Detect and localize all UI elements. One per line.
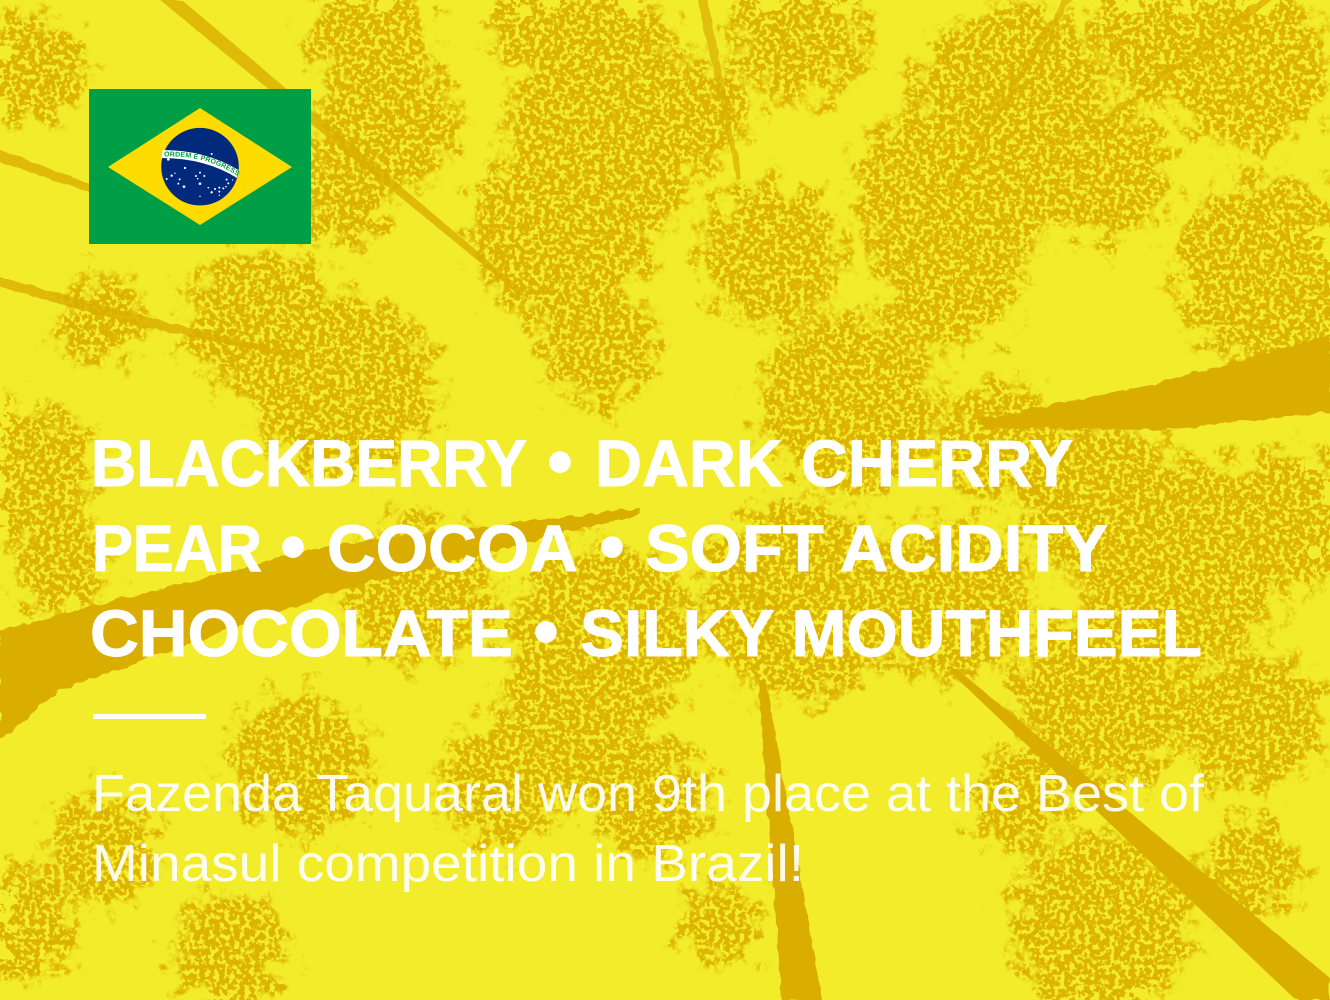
heading: flavour notes: •: [280, 507, 306, 587]
heading: flavour notes: •: [547, 422, 573, 502]
heading: flavour notes: PEAR: [92, 511, 262, 585]
heading: flavour notes: DARK CHERRY: [595, 426, 1073, 500]
heading: flavour notes: •: [533, 592, 559, 672]
heading: flavour notes: COCOA: [327, 511, 578, 585]
text block: competition note: Fazenda Taquaral won 9th place at the Best of: [92, 765, 1205, 823]
heading: flavour notes: [90, 422, 1202, 672]
heading: flavour notes: •: [599, 507, 625, 587]
text block: competition note: Minasul competition in Brazil!: [92, 835, 804, 893]
text block: competition note: [92, 765, 1205, 893]
heading: flavour notes: SOFT ACIDITY: [645, 511, 1108, 585]
heading: flavour notes: BLACKBERRY: [91, 426, 527, 500]
divider rule: [93, 714, 206, 719]
heading: flavour notes: SILKY MOUTHFEEL: [580, 596, 1202, 670]
icon: Brazilian flag: [89, 89, 311, 244]
heading: flavour notes: CHOCOLATE: [90, 596, 513, 670]
